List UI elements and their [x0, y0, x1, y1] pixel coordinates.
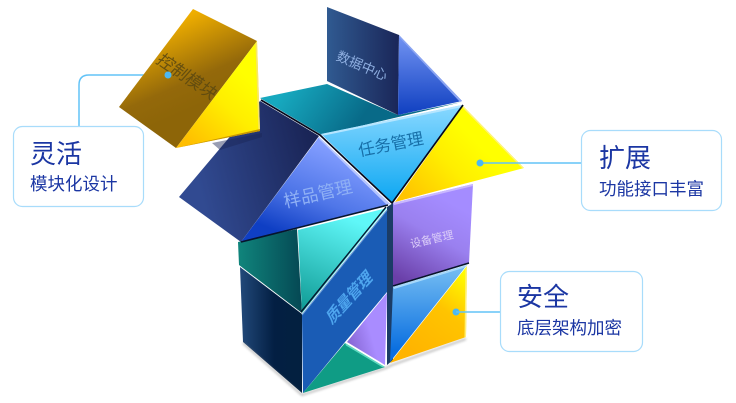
quality management block [301, 207, 387, 393]
quality blue panel [302, 210, 387, 393]
roof dark separators [261, 100, 463, 203]
expansion anchor dot [476, 160, 484, 166]
sample roof navy face [179, 101, 319, 242]
expansion title: 扩展 [599, 143, 651, 173]
callout: security [500, 272, 642, 352]
callout: flexible [14, 126, 144, 206]
security subtitle: 底层架构加密 [517, 318, 622, 338]
control module label: 控制模块 [152, 51, 222, 103]
cyan triangle [298, 208, 387, 313]
lavender triangle [347, 293, 387, 365]
lower navy face [240, 267, 302, 393]
data center blue triangle [398, 35, 462, 115]
control module face [119, 9, 257, 148]
task label: 任务管理 [357, 129, 425, 160]
data center block [327, 7, 462, 115]
sample label: 样品管理 [282, 176, 354, 212]
yellow triangle [390, 266, 467, 363]
flexible title: 灵活 [30, 139, 82, 169]
callout: expansion [582, 130, 722, 210]
control module yellow triangle [176, 41, 260, 148]
data center label: 数据中心 [334, 49, 390, 84]
blue triangle [390, 265, 467, 362]
expansion subtitle: 功能接口丰富 [599, 179, 704, 199]
device label: 设备管理 [409, 227, 455, 251]
sample triangle [241, 137, 390, 242]
connector: flexible to control module [79, 75, 168, 126]
floor shadow [243, 339, 466, 395]
task triangle [321, 105, 462, 202]
teal side face [238, 229, 302, 313]
green triangle [303, 343, 385, 393]
sample management block [179, 101, 390, 242]
column dark strip [387, 203, 393, 365]
connector: security [456, 311, 500, 313]
control module anchor dot [164, 72, 172, 78]
security block [390, 263, 469, 363]
upper lower left teal block [238, 205, 388, 313]
security title: 安全 [517, 282, 569, 312]
roof top teal plane [260, 84, 462, 135]
security anchor dot [452, 308, 460, 316]
device management block [393, 184, 473, 286]
task management block [321, 105, 462, 202]
purple panel [393, 184, 473, 286]
control module block [119, 9, 262, 150]
flexible subtitle: 模块化设计 [30, 174, 118, 194]
connector: expansion [480, 162, 581, 164]
data center face [327, 7, 399, 115]
expansion yellow triangle [395, 106, 524, 202]
quality label: 质量管理 [324, 266, 375, 329]
